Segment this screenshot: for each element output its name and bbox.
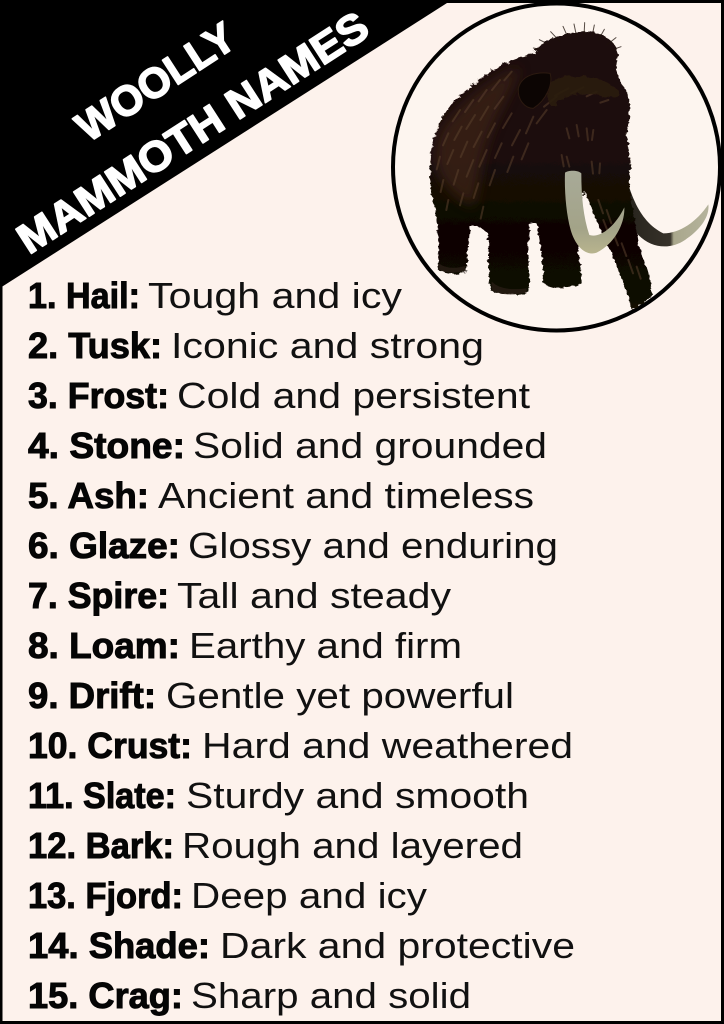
item 10 — [28, 725, 573, 766]
mammoth near tusk — [565, 171, 624, 253]
mammoth fur streaks — [437, 72, 641, 279]
item 4: Solid and grounded — [193, 425, 547, 466]
item 9: Gentle yet powerful — [166, 675, 514, 716]
item 6 — [28, 525, 558, 566]
item 5: Ancient and timeless — [158, 475, 534, 516]
item 4: 4. Stone: — [28, 425, 185, 466]
black title corner — [0, 0, 447, 288]
mammoth head crown — [548, 76, 619, 107]
title — [8, 2, 377, 263]
names list — [28, 275, 575, 1016]
circular photo frame — [393, 4, 720, 330]
item 2: Iconic and strong — [171, 325, 484, 366]
item 13 — [28, 875, 428, 916]
item 12: Rough and layered — [182, 825, 523, 866]
item 5 — [28, 475, 534, 516]
item 8: 8. Loam: — [28, 625, 180, 666]
item 1 — [28, 275, 403, 316]
item 1: 1. Hail: — [28, 275, 140, 316]
item 8 — [28, 625, 462, 666]
item 4 — [28, 425, 547, 466]
item 1: Tough and icy — [148, 275, 403, 316]
item 2 — [28, 325, 484, 366]
item 12 — [28, 825, 523, 866]
item 7 — [28, 575, 452, 616]
item 5: 5. Ash: — [28, 475, 149, 516]
item 8: Earthy and firm — [189, 625, 462, 666]
icon: woolly mammoth — [430, 23, 709, 310]
title line: MAMMOTH NAMES: MAMMOTH NAMES — [8, 2, 377, 263]
item 10: 10. Crust: — [28, 725, 192, 766]
item 14 — [28, 925, 575, 966]
item 9: 9. Drift: — [28, 675, 156, 716]
item 15 — [28, 975, 471, 1016]
item 11: Sturdy and smooth — [186, 775, 529, 816]
item 14: 14. Shade: — [28, 925, 210, 966]
mammoth toes — [438, 263, 527, 294]
item 9 — [28, 675, 514, 716]
mammoth far tusk — [622, 177, 709, 246]
item 3 — [28, 375, 530, 416]
item 2: 2. Tusk: — [28, 325, 162, 366]
item 7: 7. Spire: — [28, 575, 169, 616]
item 7: Tall and steady — [177, 575, 452, 616]
item 11 — [28, 775, 529, 816]
item 3: Cold and persistent — [177, 375, 530, 416]
item 6: 6. Glaze: — [28, 525, 180, 566]
mammoth head tuft hairs — [533, 23, 621, 50]
mammoth ear — [518, 73, 551, 108]
item 11: 11. Slate: — [28, 775, 176, 816]
mammoth lit back fur — [435, 67, 520, 207]
mammoth body — [430, 32, 652, 310]
item 10: Hard and weathered — [202, 725, 573, 766]
title line: WOOLLY: WOOLLY — [67, 13, 244, 151]
item 3: 3. Frost: — [28, 375, 169, 416]
item 6: Glossy and enduring — [188, 525, 558, 566]
item 14: Dark and protective — [220, 925, 575, 966]
item 13: Deep and icy — [191, 875, 428, 916]
item 15: 15. Crag: — [28, 975, 183, 1016]
item 12: 12. Bark: — [28, 825, 174, 866]
item 15: Sharp and solid — [191, 975, 471, 1016]
item 13: 13. Fjord: — [28, 875, 183, 916]
